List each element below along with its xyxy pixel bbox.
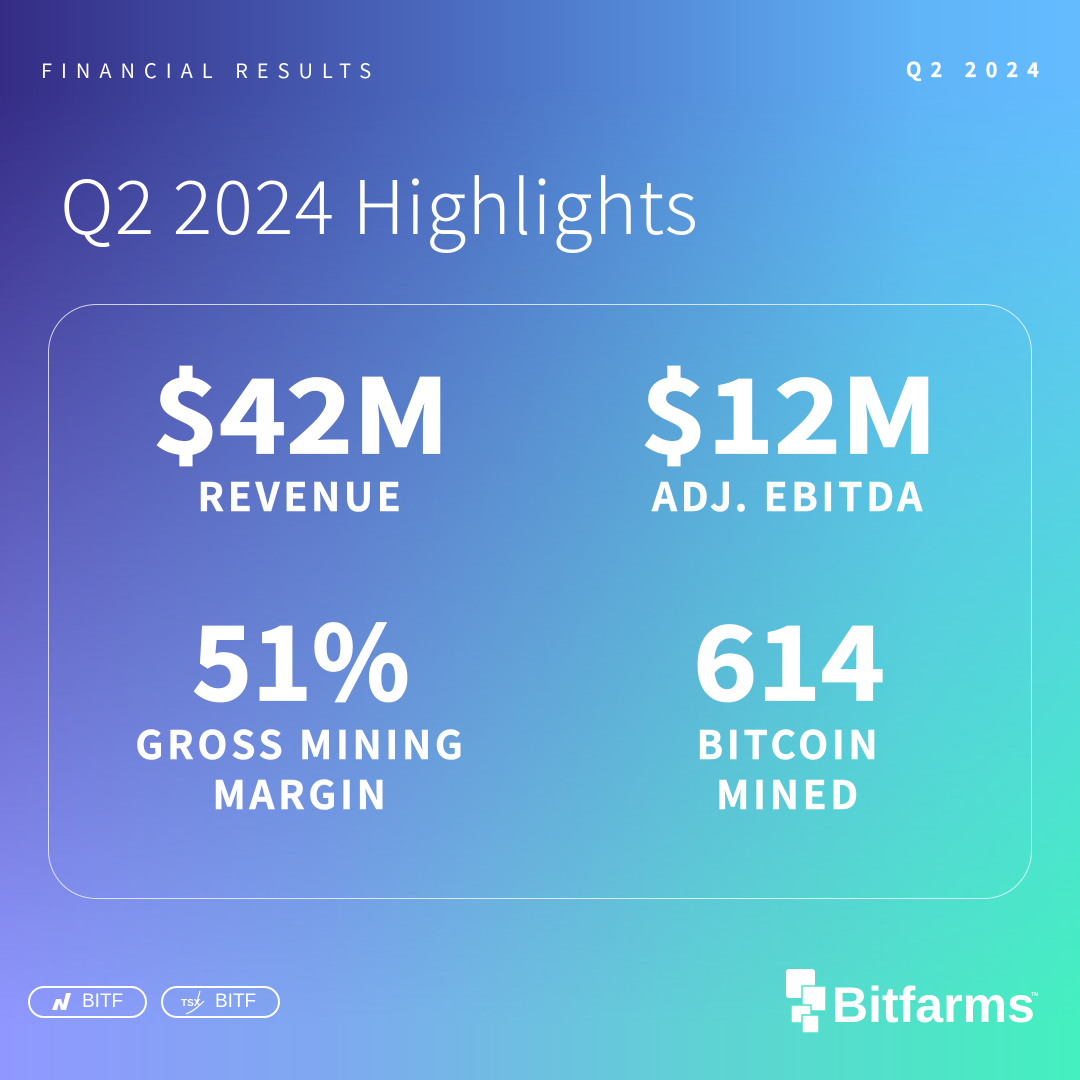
icon: TSX: TSX <box>181 998 201 1009</box>
metric: gross mining margin: MARGIN <box>212 765 390 821</box>
icon: stacked squares <box>786 969 826 1034</box>
metric: bitcoin mined <box>693 583 885 821</box>
metric: gross mining margin <box>135 583 467 821</box>
title: Q2 2024 Highlights <box>60 149 699 256</box>
eyebrow: financial results: FINANCIAL RESULTS <box>41 55 380 84</box>
badge: Nasdaq BITF <box>28 986 147 1018</box>
panel: metrics <box>48 304 1032 899</box>
metric: bitcoin mined: 614 <box>693 583 885 730</box>
icon: TSX <box>181 990 204 1014</box>
ticker: BITF <box>215 991 256 1012</box>
logo: Bitfarms <box>786 969 1038 1034</box>
metric: bitcoin mined: BITCOIN <box>697 715 881 771</box>
icon: Nasdaq <box>52 993 71 1010</box>
metric: gross mining margin: 51% <box>192 583 410 730</box>
wordmark: Bitfarms <box>832 977 1035 1033</box>
badge: TSX BITF <box>161 986 280 1018</box>
metric: revenue: $42M <box>153 336 449 483</box>
eyebrow: quarter: Q2 2024 <box>906 54 1048 83</box>
ticker: BITF <box>82 991 123 1012</box>
metric: adjusted EBITDA: $12M <box>641 336 937 483</box>
trademark: TM <box>1031 991 1038 998</box>
metric: adjusted EBITDA: ADJ. EBITDA <box>652 467 926 523</box>
metric: bitcoin mined: MINED <box>716 765 862 821</box>
metric: gross mining margin: GROSS MINING <box>135 715 467 771</box>
metric: revenue: REVENUE <box>198 467 404 523</box>
